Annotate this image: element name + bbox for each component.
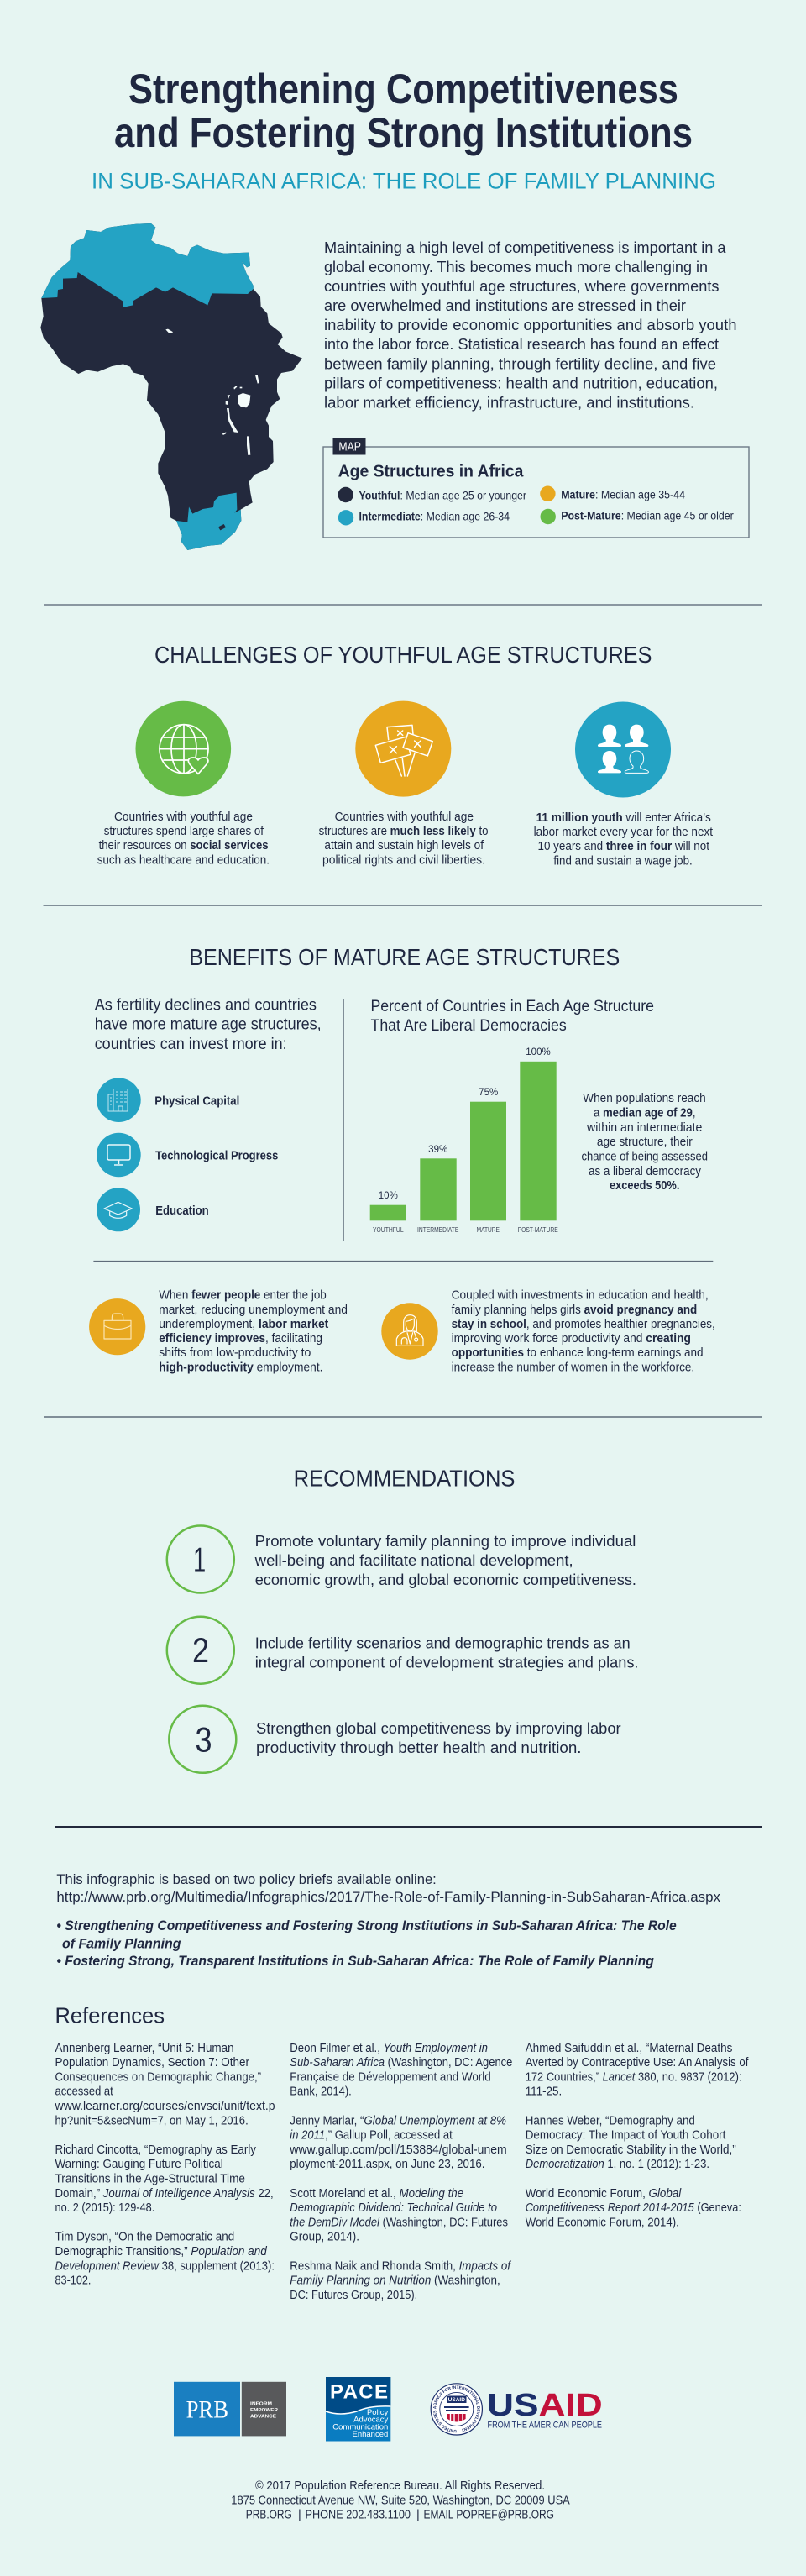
legend item: mature: [540, 485, 685, 501]
title: and Fostering Strong Institutions: [114, 109, 693, 156]
text: girls: family planning helps girls avoid pregnancy and: [452, 1304, 697, 1317]
text: political rights: structures are much less likely to: [319, 825, 489, 838]
intro paragraph: labor market efficiency, infrastructure, and institutions.: [324, 395, 694, 412]
text: youth employment: 10 years and three in four will not: [537, 840, 709, 853]
map: lakes: [165, 329, 259, 455]
icon: monitor: [107, 1145, 130, 1165]
text: social services: such as healthcare and education.: [97, 854, 270, 868]
text: social services: structures spend large shares of: [104, 825, 264, 838]
recommendation 2: Include fertility scenarios and demographic trends as an: [255, 1634, 631, 1652]
references column 2: Sub-Saharan Africa (Washington, DC: Agence: [290, 2056, 512, 2070]
USAID seal: UNITED STATES AGENCY FOR INTERNATIONAL DEVELOPMENT: [433, 2385, 480, 2432]
footer: © 2017 Population Reference Bureau. All Rights Reserved.: [255, 2479, 545, 2493]
text: girls: Coupled with investments in education and health,: [452, 1289, 709, 1303]
recommendation 3: 3: [195, 1720, 212, 1760]
references column 1: Warning: Gauging Future Political: [55, 2158, 223, 2171]
bar: youthful: [370, 1191, 406, 1234]
title: [114, 66, 693, 156]
footer: |: [416, 2509, 420, 2522]
references column 3: Hannes Weber, “Demography and: [526, 2114, 695, 2127]
bar: mature: [470, 1088, 506, 1234]
subtitle: IN SUB-SAHARAN AFRICA: THE ROLE OF FAMILY PLANNING: [92, 168, 716, 193]
USAID seal: USAID: [448, 2397, 465, 2403]
logo: PRB: INFORM: [250, 2401, 272, 2406]
references column 2: www.gallup.com/poll/153884/global-unem: [289, 2143, 507, 2157]
map: intermediate south: [176, 493, 241, 550]
text: labor market: When fewer people enter the job: [159, 1289, 327, 1303]
intro paragraph: countries with youthful age structures, where governments: [324, 278, 719, 295]
intro paragraph: pillars of competitiveness: health and nutrition, education,: [324, 375, 718, 391]
intro paragraph: [324, 239, 737, 412]
references column 1: Population Dynamics, Section 7: Other: [55, 2056, 249, 2070]
references column 1: accessed at: [55, 2085, 113, 2099]
icon: graduation cap: [104, 1202, 132, 1218]
panel: challenge political rights: [319, 701, 489, 868]
heading: references: References: [55, 2002, 165, 2028]
intro paragraph: Maintaining a high level of competitiveness is important in a: [324, 239, 726, 256]
recommendation 1: [167, 1525, 636, 1592]
legend heading: Age Structures in Africa: [338, 463, 524, 481]
logo: PRB: ADVANCE: [250, 2415, 276, 2420]
text: youth employment: find and sustain a wage job.: [553, 855, 693, 868]
text: social services: their resources on social services: [99, 839, 269, 853]
recommendation 2: 2: [192, 1630, 209, 1670]
recommendation 1: Promote voluntary family planning to improve individual: [255, 1532, 636, 1550]
footer: PRB.ORG: [246, 2509, 292, 2522]
item: physical capital: [97, 1078, 239, 1122]
recommendation 1: well-being and facilitate national development,: [254, 1551, 573, 1569]
logo: PRB: EMPOWER: [250, 2408, 278, 2413]
text: policy brief titles: • Strengthening Competitiveness and Fostering Strong Institutions in Sub-Saharan Africa: The Role: [56, 1918, 677, 1933]
references column 2: Bank, 2014).: [290, 2085, 352, 2099]
text: policy brief titles: • Fostering Strong, Transparent Institutions in Sub-Saharan Africa: The Role of Family Planning: [56, 1954, 654, 1969]
text: social services: [97, 811, 270, 868]
logo: PACE: PACE: [330, 2381, 388, 2404]
references column 2: Jenny Marlar, “Global Unemployment at 8%: [290, 2114, 506, 2127]
references column 2: Reshma Naik and Rhonda Smith, Impacts of: [290, 2259, 512, 2273]
text: median age callout: exceeds 50%.: [610, 1179, 679, 1193]
references column 1: Richard Cincotta, “Demography as Early: [55, 2143, 257, 2157]
legend item: intermediate: Intermediate: Median age 26-34: [359, 510, 510, 523]
references column 1: hp?unit=5&secNum=7, on May 1, 2016.: [55, 2114, 249, 2127]
intro paragraph: global economy. This becomes much more challenging in: [324, 259, 708, 275]
intro paragraph: between family planning, through fertility decline, and five: [324, 356, 716, 373]
bar: youthful: 10%: [379, 1191, 398, 1201]
label: Technological Progress: [155, 1150, 278, 1163]
footer: [231, 2479, 570, 2522]
bar: post-mature: 100%: [526, 1047, 551, 1057]
map of Africa by age structure: [40, 223, 302, 550]
text: policy briefs source: [56, 1871, 721, 1905]
recommendation 1: economic growth, and global economic competitiveness.: [255, 1571, 636, 1588]
references column 3: Ahmed Saifuddin et al., “Maternal Deaths: [526, 2042, 732, 2055]
bar: mature: 75%: [479, 1088, 498, 1098]
text: political rights: political rights and civil liberties.: [322, 854, 485, 868]
heading: challenges: CHALLENGES OF YOUTHFUL AGE STRUCTURES: [154, 642, 652, 668]
references column 3: Size on Democratic Stability in the World,”: [526, 2143, 736, 2157]
panel: labor market efficiency: [89, 1289, 348, 1374]
logo: PACE: Communication: [332, 2422, 388, 2432]
icon: female doctor: [381, 1303, 438, 1360]
references column 1: www.learner.org/courses/envsci/unit/text.p: [55, 2100, 275, 2113]
text: median age callout: chance of being assessed: [581, 1150, 708, 1163]
logo: PACE: [326, 2377, 390, 2441]
bar: intermediate: INTERMEDIATE: [417, 1225, 459, 1234]
text: median age callout: [581, 1092, 708, 1193]
text: policy briefs source: http://www.prb.org/Multimedia/Infographics/2017/The-Role-of-Family-Planning-in-SubSaharan-Africa.aspx: [56, 1889, 721, 1905]
text: political rights: [319, 811, 489, 868]
recommendation 3: [169, 1706, 621, 1773]
title: Strengthening Competitiveness: [128, 66, 678, 113]
footer: |: [298, 2509, 301, 2522]
text: political rights: attain and sustain high levels of: [324, 839, 484, 853]
references column 1: no. 2 (2015): 129-48.: [55, 2201, 154, 2215]
legend panel: age structures in Africa: [323, 438, 749, 538]
references column 1: Development Review 38, supplement (2013):: [55, 2259, 275, 2273]
text: investment intro: As fertility declines and countries: [95, 996, 317, 1015]
text: labor market: [159, 1289, 348, 1374]
references column 1: Transitions in the Age-Structural Time: [55, 2172, 245, 2185]
recommendation 2: integral component of development strategies and plans.: [255, 1654, 638, 1671]
legend item: mature: Mature: Median age 35-44: [561, 487, 685, 501]
text: political rights: Countries with youthful age: [335, 811, 474, 824]
text: policy briefs source: This infographic is based on two policy briefs available online:: [56, 1871, 437, 1887]
text: girls: stay in school, and promotes healthier pregnancies,: [452, 1318, 715, 1331]
recommendation 2: [167, 1617, 639, 1684]
map: intermediate north: [41, 223, 254, 307]
text: median age callout: within an intermediate: [586, 1121, 702, 1135]
text: girls: improving work force productivity and creating: [452, 1332, 691, 1346]
references column 1: 83-102.: [55, 2274, 91, 2288]
text: girls: opportunities to enhance long-term earnings and: [452, 1346, 704, 1360]
icon: buildings: [108, 1089, 128, 1111]
references column 3: Competitiveness Report 2014-2015 (Geneva:: [526, 2201, 741, 2215]
panel: challenge social services: [97, 701, 270, 868]
footer: EMAIL POPREF@PRB.ORG: [423, 2509, 554, 2522]
text: investment intro: countries can invest more in:: [95, 1035, 287, 1053]
references column 1: Domain,” Journal of Intelligence Analysis 22,: [55, 2187, 274, 2201]
text: girls: [452, 1289, 715, 1374]
text: labor market: shifts from low-productivity to: [159, 1346, 311, 1360]
item: technological progress: [97, 1133, 278, 1177]
USAID tagline: FROM THE AMERICAN PEOPLE: [487, 2421, 602, 2431]
text: median age callout: a median age of 29,: [594, 1107, 695, 1120]
text: social services: Countries with youthful age: [114, 811, 253, 824]
recommendation 3: productivity through better health and nutrition.: [256, 1739, 581, 1756]
references column 1: Demographic Transitions,” Population and: [55, 2245, 268, 2259]
legend item: youthful: Youthful: Median age 25 or younger: [359, 489, 526, 502]
text: labor market: efficiency improves, facilitating: [159, 1332, 322, 1346]
text: investment intro: have more mature age structures,: [95, 1015, 322, 1033]
references column 2: Group, 2014).: [290, 2231, 359, 2244]
heading: benefits: BENEFITS OF MATURE AGE STRUCTURES: [189, 944, 620, 970]
label: Education: [155, 1204, 209, 1218]
recommendation 1: 1: [193, 1540, 206, 1579]
chart title: That Are Liberal Democracies: [371, 1017, 567, 1035]
references column 2: in 2011,” Gallup Poll, accessed at: [290, 2129, 453, 2143]
heading: recommendations: RECOMMENDATIONS: [294, 1465, 516, 1491]
text: median age callout: as a liberal democracy: [589, 1165, 702, 1178]
references column 3: Democracy: The Impact of Youth Cohort: [526, 2129, 725, 2143]
references column 3: World Economic Forum, Global: [526, 2187, 682, 2201]
references column 3: Averted by Contraceptive Use: An Analysis of: [526, 2056, 749, 2070]
references column 2: DC: Futures Group, 2015).: [290, 2289, 417, 2302]
text: labor market: underemployment, labor market: [159, 1318, 328, 1331]
references column 2: Deon Filmer et al., Youth Employment in: [290, 2042, 488, 2055]
logo: PACE: Advocacy: [353, 2416, 389, 2425]
references column 1: [55, 2042, 275, 2288]
references column 2: Scott Moreland et al., Modeling the: [290, 2187, 463, 2201]
text: policy brief titles: of Family Planning: [62, 1936, 181, 1951]
references column 2: Family Planning on Nutrition (Washington,: [290, 2274, 500, 2288]
logo: PACE: Enhanced: [353, 2430, 388, 2439]
bar: intermediate: 39%: [428, 1145, 447, 1155]
logo: USAID: [430, 2383, 603, 2436]
logo: PRB: [174, 2382, 286, 2436]
chart title: Percent of Countries in Each Age Structure: [371, 998, 654, 1015]
label: Physical Capital: [154, 1094, 239, 1108]
legend tag: MAP: MAP: [338, 440, 361, 454]
bar: post-mature: POST-MATURE: [518, 1225, 558, 1234]
chart: liberal democracies bar chart: [370, 998, 654, 1234]
logo: PACE: Policy: [367, 2408, 389, 2417]
icon: protest signs: [355, 701, 451, 797]
USAID wordmark: USAID: [487, 2388, 603, 2423]
bar: post-mature: [518, 1047, 558, 1234]
intro paragraph: into the labor force. Statistical research has found an effect: [324, 336, 719, 353]
references column 1: Tim Dyson, “On the Democratic and: [55, 2231, 234, 2244]
recommendation 3: Strengthen global competitiveness by improving labor: [256, 1719, 621, 1737]
references column 3: Democratization 1, no. 1 (2012): 1-23.: [526, 2158, 709, 2171]
bar: mature: MATURE: [477, 1225, 500, 1234]
intro paragraph: inability to provide economic opportunities and absorb youth: [324, 317, 737, 333]
references column 3: 111-25.: [526, 2085, 562, 2099]
legend item: post-mature: Post-Mature: Median age 45 or older: [561, 509, 734, 522]
chart title: [371, 998, 654, 1035]
panel: girls education and health: [381, 1289, 715, 1374]
text: policy brief titles: [56, 1918, 677, 1969]
text: youth employment: [534, 811, 713, 868]
references column 2: the DemDiv Model (Washington, DC: Futures: [290, 2216, 508, 2229]
icon: four people: [575, 702, 671, 798]
text: investment intro: [95, 996, 322, 1053]
legend tag: MAP: [332, 438, 366, 455]
text: labor market: high-productivity employment.: [159, 1361, 322, 1374]
references column 2: Demographic Dividend: Technical Guide to: [290, 2201, 497, 2215]
text: median age callout: age structure, their: [597, 1136, 693, 1149]
text: labor market: market, reducing unemployment and: [159, 1304, 348, 1317]
footer: 1875 Connecticut Avenue NW, Suite 520, Washington, DC 20009 USA: [231, 2494, 570, 2507]
bar: youthful: YOUTHFUL: [373, 1225, 404, 1234]
logo: PRB: PRB: [186, 2395, 228, 2424]
item: education: [97, 1188, 209, 1231]
references column 2: Française de Développement and World: [290, 2070, 491, 2084]
intro paragraph: are overwhelmed and institutions are stressed in their: [324, 297, 686, 314]
text: youth employment: labor market every year for the next: [534, 826, 713, 839]
panel: challenge youth employment: [534, 702, 713, 868]
references column 1: Consequences on Demographic Change,”: [55, 2070, 261, 2084]
references column 3: World Economic Forum, 2014).: [526, 2216, 679, 2229]
text: girls: increase the number of women in the workforce.: [452, 1361, 694, 1374]
references column 2: ployment-2011.aspx, on June 23, 2016.: [290, 2158, 484, 2171]
bar: intermediate: [417, 1145, 459, 1234]
references column 3: 172 Countries,” Lancet 380, no. 9837 (2012):: [526, 2070, 742, 2084]
icon: globe with heart: [136, 701, 231, 796]
references column 2: [289, 2042, 512, 2302]
text: median age callout: When populations reach: [583, 1092, 706, 1105]
text: youth employment: 11 million youth will enter Africa’s: [536, 811, 711, 825]
references column 1: Annenberg Learner, “Unit 5: Human: [55, 2042, 234, 2055]
footer: PHONE 202.483.1100: [306, 2509, 411, 2522]
references column 3: [526, 2042, 749, 2229]
icon: briefcase: [89, 1298, 145, 1355]
